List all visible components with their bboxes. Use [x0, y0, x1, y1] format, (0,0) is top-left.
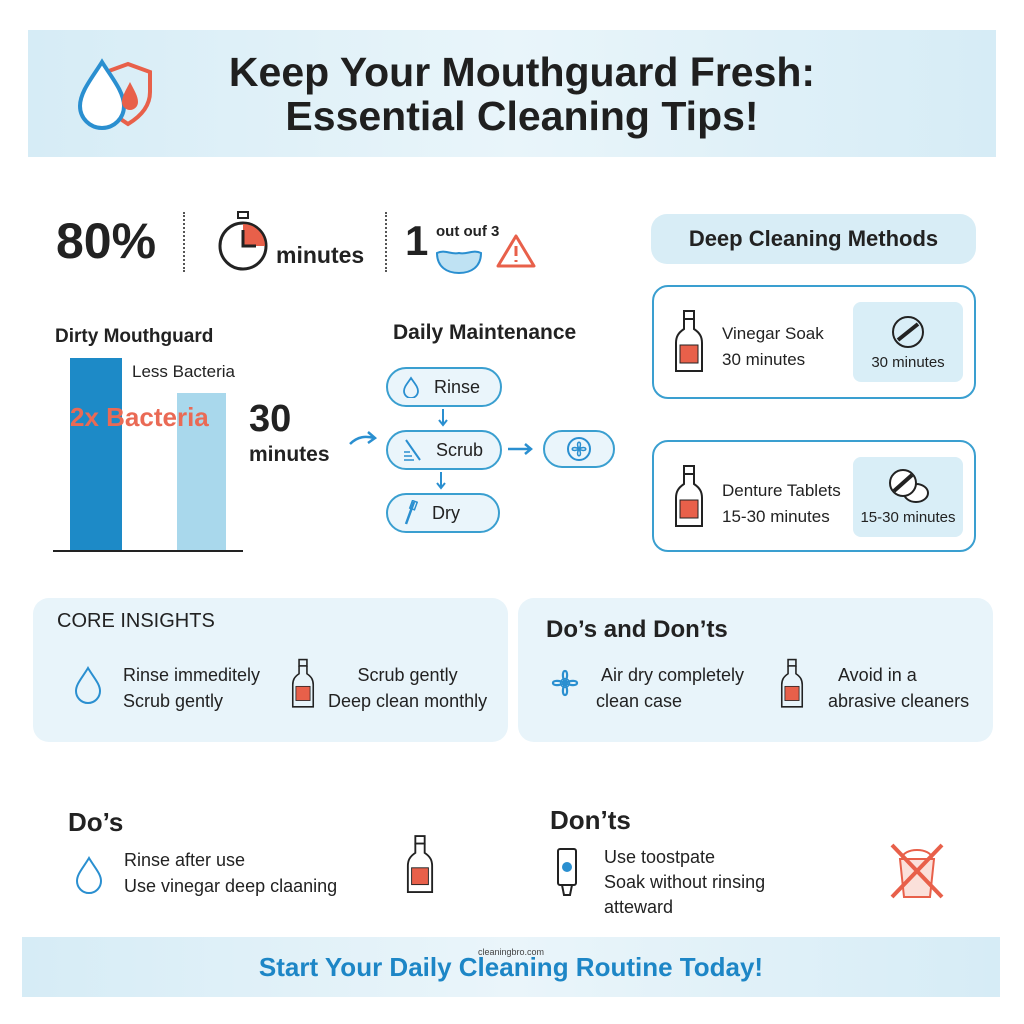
section: don'ts: Don’ts: [550, 805, 631, 835]
section: do's: Do’s: [68, 807, 123, 837]
bar chart: dirty mouthguard: [53, 326, 330, 552]
panel: do's and don'ts: Avoid in a: [838, 665, 917, 685]
bar chart: dirty mouthguard: minutes: [249, 443, 330, 466]
bar chart: dirty mouthguard: 30: [249, 398, 291, 440]
panel: do's and don'ts: Do’s and Don’ts: [546, 616, 728, 643]
flow: rinse: [386, 367, 502, 407]
icon: drop and shield: [78, 58, 152, 130]
heading: daily maintenance: Daily Maintenance: [393, 321, 576, 344]
section: don'ts: atteward: [604, 897, 673, 917]
flow: dry: [386, 493, 500, 533]
card: denture tablets: [652, 440, 976, 552]
arrow down: [436, 472, 446, 490]
panel: do's and don'ts: [518, 598, 993, 742]
panel: do's and don'ts: abrasive cleaners: [828, 691, 969, 711]
panel: core insights: Deep clean monthly: [328, 691, 487, 711]
flow: fan: [543, 430, 615, 468]
panel: core insights: Scrub gently: [123, 691, 223, 711]
card: vinegar soak: Vinegar Soak: [722, 324, 824, 343]
stat: 1 out of 3: out ouf 3: [436, 223, 499, 240]
flow: scrub: [386, 430, 502, 470]
section: do's: Use vinegar deep claaning: [124, 876, 337, 896]
bar chart: dirty mouthguard: 2x Bacteria: [70, 402, 209, 432]
footer band: [22, 937, 1000, 997]
stat: 1 out of 3: 1: [405, 217, 428, 264]
title: [229, 49, 815, 139]
panel: core insights: [33, 598, 508, 742]
panel: core insights: Rinse immeditely: [123, 665, 260, 685]
panel: core insights: Scrub gently: [358, 665, 458, 685]
section: don'ts: Soak without rinsing: [604, 872, 765, 892]
card: denture tablets: 15-30 minutes: [722, 507, 830, 526]
bar chart: dirty mouthguard: Dirty Mouthguard: [55, 326, 213, 347]
card: vinegar soak: 30 minutes: [722, 350, 805, 369]
bar chart: dirty mouthguard: Less Bacteria: [132, 362, 235, 381]
card: denture tablets: Denture Tablets: [722, 481, 841, 500]
stat: stopwatch minutes: minutes: [276, 242, 364, 268]
title: Essential Cleaning Tips!: [285, 93, 759, 139]
stat: 1 out of 3: [405, 217, 536, 274]
card: vinegar soak: 30 minutes: [871, 354, 945, 371]
stat: 80%: 80%: [56, 213, 156, 269]
footer band: Start Your Daily Cleaning Routine Today!: [259, 952, 763, 982]
section: don'ts: Use toostpate: [604, 847, 715, 867]
arrow: curved: [349, 431, 377, 445]
card: vinegar soak: [652, 285, 976, 399]
heading: deep cleaning methods: [651, 214, 976, 264]
header band: [28, 30, 996, 157]
arrow right: [508, 443, 533, 455]
section: do's: [68, 807, 434, 896]
panel: core insights: CORE INSIGHTS: [57, 610, 215, 632]
stat: stopwatch minutes: [218, 211, 364, 270]
section: don'ts: [550, 805, 944, 917]
arrow down: [438, 409, 448, 426]
footer band: cleaningbro.com: [478, 947, 544, 957]
panel: do's and don'ts: clean case: [596, 691, 682, 711]
flow: dry: Dry: [432, 502, 460, 522]
flow: scrub: Scrub: [436, 440, 483, 460]
section: do's: Rinse after use: [124, 850, 245, 870]
heading: deep cleaning methods: Deep Cleaning Methods: [689, 226, 938, 251]
card: denture tablets: 15-30 minutes: [860, 509, 956, 526]
panel: do's and don'ts: Air dry completely: [601, 665, 744, 685]
flow: rinse: Rinse: [434, 376, 480, 396]
title: Keep Your Mouthguard Fresh:: [229, 49, 815, 95]
